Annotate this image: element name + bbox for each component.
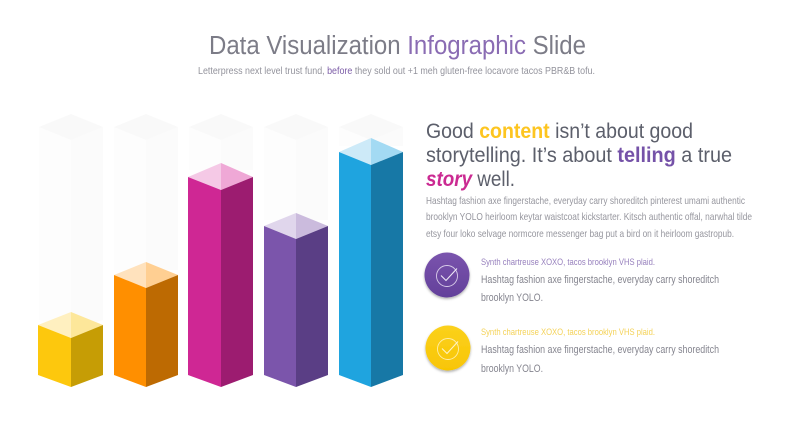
- headline: [426, 119, 732, 191]
- bar 5: blue: [339, 114, 403, 387]
- icon: yellow check badge: [426, 326, 470, 370]
- body paragraph: [426, 195, 752, 240]
- headline: story well.: [426, 167, 515, 191]
- item text: brooklyn YOLO.: [481, 363, 543, 375]
- headline: storytelling. It’s about telling a true: [426, 143, 732, 167]
- feature item: yellow: [426, 326, 719, 375]
- bar 1: yellow: [38, 114, 103, 387]
- bar 4: purple: [264, 114, 328, 387]
- subtitle: Letterpress next level trust fund, before they sold out +1 meh gluten-free locavore tacos PBR&B tofu.: [198, 65, 595, 77]
- title: Data Visualization Infographic Slide: [209, 32, 586, 60]
- headline: Good content isn’t about good: [426, 119, 693, 143]
- item text: brooklyn YOLO.: [481, 292, 543, 304]
- bar chart: [38, 114, 403, 387]
- bar 2: orange: [114, 114, 178, 387]
- item text: [481, 344, 719, 375]
- item heading: Synth chartreuse XOXO, tacos brooklyn VHS plaid.: [481, 257, 655, 268]
- feature item: purple: [424, 252, 719, 304]
- icon: purple check badge: [424, 252, 470, 298]
- item heading: Synth chartreuse XOXO, tacos brooklyn VHS plaid.: [481, 327, 655, 338]
- item text: Hashtag fashion axe fingerstache, everyday carry shoreditch: [481, 344, 719, 356]
- item text: [481, 274, 719, 304]
- bar 3: magenta: [188, 114, 253, 387]
- item text: Hashtag fashion axe fingerstache, everyday carry shoreditch: [481, 274, 719, 286]
